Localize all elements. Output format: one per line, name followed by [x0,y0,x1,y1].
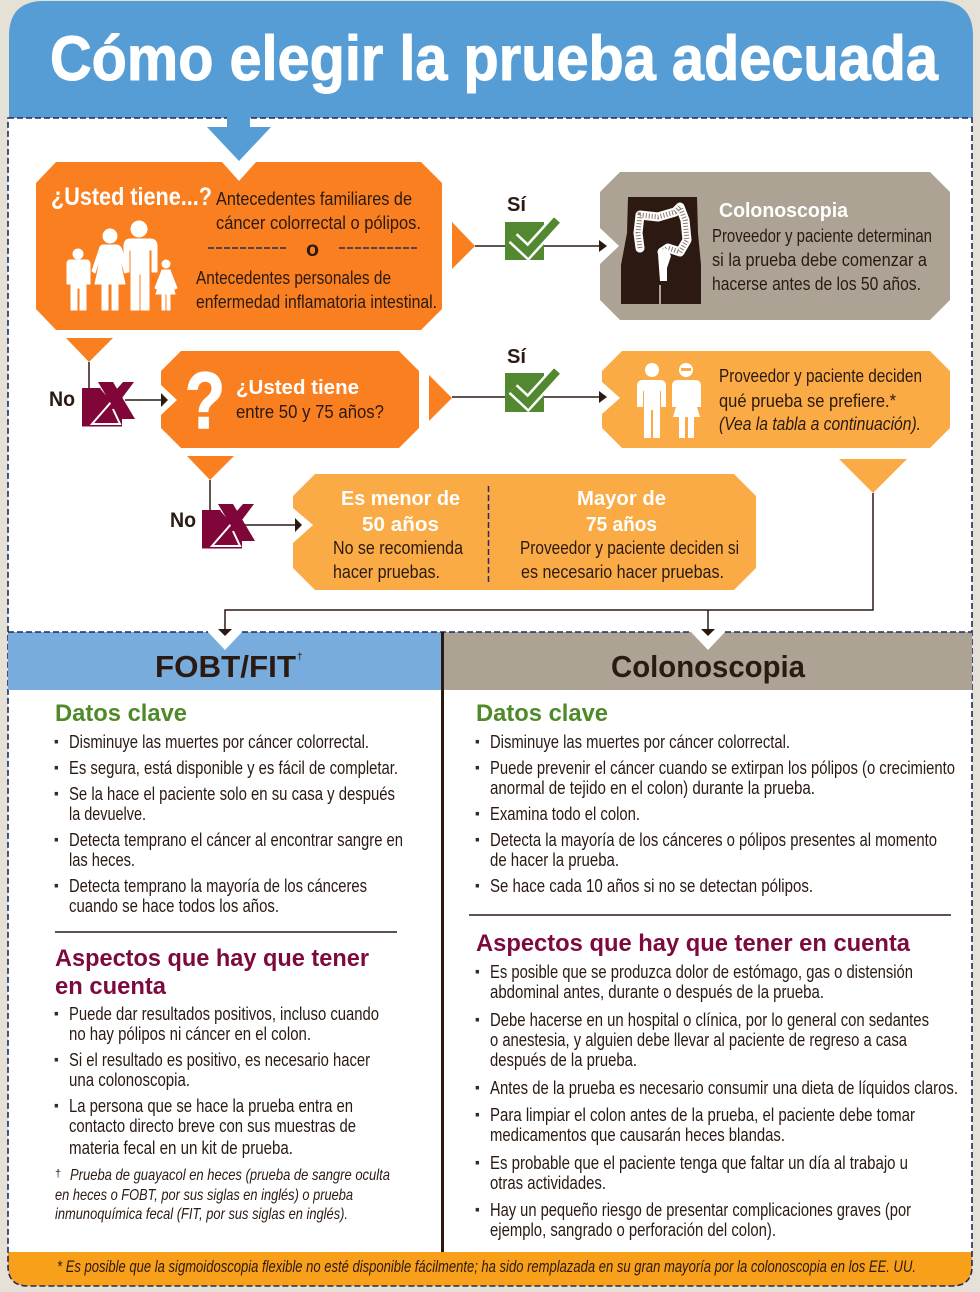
list: key facts: · [474,873,482,900]
text: personal history [196,268,437,312]
heading: FOBT/FIT: FOBT/FIT [155,649,296,684]
text: over 75: Mayor de [577,488,666,510]
list: key facts: Disminuye las muertes por cáncer colorrectal. [490,732,790,752]
list: key facts: · [474,755,482,782]
list: key facts: · [53,781,61,808]
list: key facts [53,729,403,916]
panel: colonoscopy column [469,700,958,1240]
list: key facts: anormal de tejido en el colon) durante la prueba. [490,778,815,798]
list: key facts: las heces. [69,850,135,870]
text: age question: entre 50 y 75 años? [236,402,384,422]
list: considerations [53,1001,379,1158]
heading: datos clave: Datos clave [55,700,187,727]
text: family history: cáncer colorrectal o pólipos. [216,213,421,233]
text: under 50: hacer pruebas. [333,562,440,582]
list: considerations: contacto directo breve con sus muestras de [69,1116,356,1136]
text: colonoscopy decision: Proveedor y paciente determinan [712,226,932,246]
list: key facts: Se la hace el paciente solo en su casa y después [69,784,395,804]
text: under 50: No se recomienda [333,538,464,558]
text: over 75 [520,488,739,582]
list: considerations: Puede dar resultados positivos, incluso cuando [69,1004,379,1024]
footnote: en heces o FOBT, por sus siglas en inglés) o prueba [55,1187,353,1204]
text: age question [236,377,384,422]
icon: check [505,220,557,260]
text: personal history: enfermedad inflamatoria intestinal. [196,292,437,312]
list: key facts: Es segura, está disponible y es fácil de completar. [69,758,398,778]
panel: colonoscopy early [600,172,950,320]
footnote: Prueba de guayacol en heces (prueba de sangre oculta [70,1167,390,1184]
list: considerations: · [474,1075,482,1102]
text: decide: (Vea la tabla a continuación). [719,414,921,434]
list: key facts [474,729,955,900]
panel: FOBT/FIT header: † [297,652,303,663]
footnote: inmunoquímica fecal (FIT, por sus siglas en inglés). [55,1206,348,1223]
arrow: no branch 2 [170,456,302,548]
heading: colonoscopia: Colonoscopia [611,649,806,684]
text: under 50: 50 años [362,514,439,536]
list: considerations: Es probable que el paciente tenga que faltar un día al trabajo u [490,1153,908,1173]
list: considerations: · [474,1150,482,1177]
list: key facts: Examina todo el colon. [490,804,640,824]
list: considerations: · [474,959,482,986]
panel: FOBT/FIT header [8,632,441,690]
panel: provider and patient decide [602,351,950,448]
list: key facts: · [53,755,61,782]
text: decide [719,366,922,434]
heading: datos clave: Datos clave [476,700,608,727]
list: considerations [474,959,958,1240]
text: colonoscopy decision: hacerse antes de los 50 años. [712,274,921,294]
label: no: No [170,509,196,532]
list: considerations: · [53,1093,61,1120]
icon: x [202,504,255,548]
label: no: No [49,388,75,411]
list: considerations: no hay pólipos ni cáncer en el colon. [69,1024,311,1044]
list: considerations: · [53,1047,61,1074]
text: colonoscopy decision: si la prueba debe comenzar a [712,250,928,270]
list: key facts: Disminuye las muertes por cáncer colorrectal. [69,732,369,752]
text: colonoscopy decision [712,226,932,294]
panel: age question [161,351,419,448]
arrow: yes branch 2 [429,346,607,421]
arrow: entry down [207,116,271,161]
heading: aspectos: en cuenta [55,973,167,1000]
separator: o: o [306,238,319,261]
list: key facts: · [53,873,61,900]
panel: colonoscopy header [444,632,972,690]
list: considerations: ejemplo, sangrado o perforación del colon). [490,1220,776,1240]
title banner [9,1,973,118]
list: key facts: de hacer la prueba. [490,850,619,870]
heading: aspectos: Aspectos que hay que tener en cuenta [476,930,911,957]
heading: colonoscopia: Colonoscopia [719,200,849,222]
icon: patient and doctor [637,363,701,438]
list: considerations: Si el resultado es positivo, es necesario hacer [69,1050,370,1070]
list: key facts: · [474,729,482,756]
list: considerations: · [474,1102,482,1129]
list: considerations: La persona que se hace la prueba entra en [69,1096,353,1116]
text: family history [216,189,421,233]
text: personal history: Antecedentes personales de [196,268,391,288]
list: key facts: · [474,827,482,854]
arrow: yes branch 1 [452,194,607,269]
arrow: connector to tests [218,459,907,636]
list: considerations: · [474,1007,482,1034]
text: decide: Proveedor y paciente deciden [719,366,922,386]
text: over 75: es necesario hacer pruebas. [521,562,724,582]
list: considerations: medicamentos que causarán heces blandas. [490,1125,785,1145]
icon: check [505,371,557,412]
text: age question: ¿Usted tiene [236,377,359,399]
text: under 50: Es menor de [341,488,460,510]
footnote [55,1167,390,1223]
panel: age outcomes [293,474,756,590]
icon: question mark: ? [185,356,225,445]
icon: colon [621,197,701,304]
list: key facts: cuando se hace todos los años. [69,896,279,916]
list: key facts: Detecta temprano el cáncer al encontrar sangre en [69,830,403,850]
text: under 50 [333,488,464,582]
icon: family [67,221,177,310]
list: considerations: · [53,1001,61,1028]
text: over 75: 75 años [586,514,657,536]
list: key facts: Detecta temprano la mayoría de los cánceres [69,876,367,896]
text: family history: Antecedentes familiares de [216,189,412,209]
heading: usted tiene: ¿Usted tiene...? [51,183,212,211]
label: si: Sí [507,346,527,368]
panel: FOBT/FIT column [53,700,403,1223]
list: key facts: · [53,827,61,854]
list: considerations: otras actividades. [490,1173,606,1193]
label: si: Sí [507,194,527,216]
list: key facts: Se hace cada 10 años si no se detectan pólipos. [490,876,813,896]
footnote: † [55,1168,61,1180]
text: over 75: Proveedor y paciente deciden si [520,538,739,558]
footer band [8,1252,972,1286]
list: key facts: la devuelve. [69,804,146,824]
list: considerations: materia fecal en un kit de prueba. [69,1138,293,1158]
panel: family history question [36,162,442,330]
list: considerations: · [474,1197,482,1224]
icon: x [82,382,135,426]
list: considerations: después de la prueba. [490,1050,637,1070]
heading: aspectos [55,945,369,1000]
list: considerations: abdominal antes, durante o después de la prueba. [490,982,824,1002]
arrow: no branch 1 [49,338,168,426]
list: key facts: · [474,801,482,828]
text: decide: qué prueba se prefiere.* [719,391,896,411]
heading: aspectos: Aspectos que hay que tener [55,945,369,972]
list: considerations: una colonoscopia. [69,1070,190,1090]
list: key facts: · [53,729,61,756]
